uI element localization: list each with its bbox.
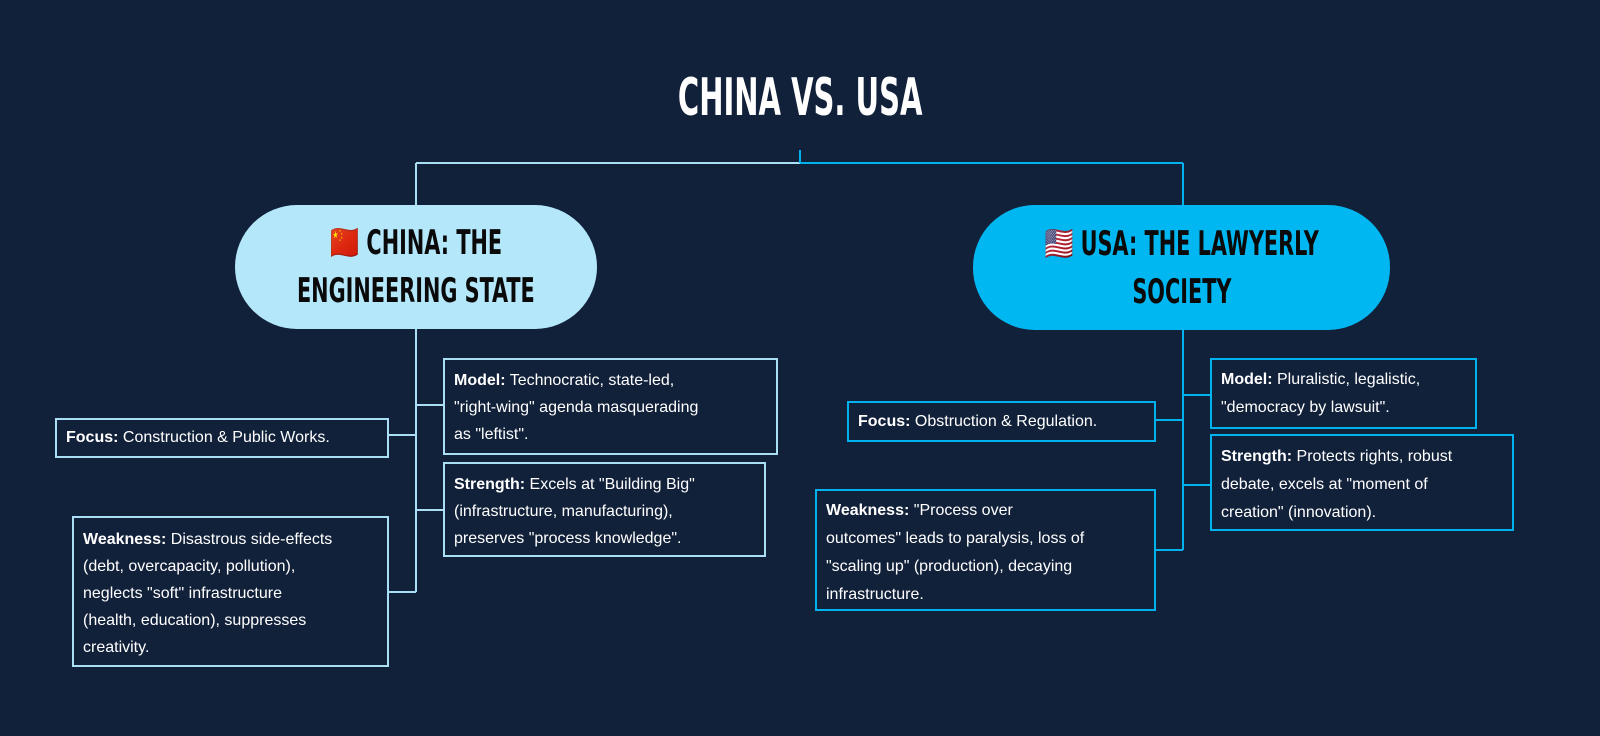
box: USA model: "democracy by lawsuit". xyxy=(1221,399,1390,416)
box: China weakness: neglects "soft" infrastructure xyxy=(83,585,282,602)
box: China weakness: (debt, overcapacity, pollution), xyxy=(83,558,295,575)
box: China model: as "leftist". xyxy=(454,426,528,443)
box: China strength: Strength: Excels at "Building Big" xyxy=(454,476,695,493)
box: USA weakness: outcomes" leads to paralysis, loss of xyxy=(826,530,1084,547)
box: China focus: Focus: Construction & Public Works. xyxy=(66,429,330,446)
title: CHINA VS. USA xyxy=(678,68,922,128)
box: USA weakness: "scaling up" (production), decaying xyxy=(826,558,1072,575)
box: China weakness xyxy=(72,516,389,667)
pill: China: ENGINEERING STATE xyxy=(297,271,535,311)
box: USA model: Model: Pluralistic, legalistic, xyxy=(1221,371,1420,388)
pill: USA: 🇺🇸 USA: THE LAWYERLY xyxy=(1044,224,1319,264)
box: USA strength xyxy=(1210,434,1514,531)
box: China strength: (infrastructure, manufacturing), xyxy=(454,503,673,520)
pill: USA xyxy=(973,205,1390,330)
box: USA model xyxy=(1210,358,1477,429)
box: China model: Model: Technocratic, state-led, xyxy=(454,372,674,389)
pill: China: 🇨🇳 CHINA: THE xyxy=(330,223,502,263)
box: China model xyxy=(443,358,778,455)
box: USA focus: Focus: Obstruction & Regulation. xyxy=(858,413,1097,430)
box: China weakness: (health, education), suppresses xyxy=(83,612,306,629)
box: USA strength: Strength: Protects rights, robust xyxy=(1221,448,1452,465)
pill: USA: SOCIETY xyxy=(1132,272,1231,312)
box: China weakness: Weakness: Disastrous side-effects xyxy=(83,531,332,548)
box: USA weakness: Weakness: "Process over xyxy=(826,502,1013,519)
box: China weakness: creativity. xyxy=(83,639,149,656)
box: China focus xyxy=(55,418,389,458)
box: USA weakness: infrastructure. xyxy=(826,586,924,603)
box: China strength: preserves "process knowledge". xyxy=(454,530,681,547)
box: China strength xyxy=(443,462,766,557)
box: USA weakness xyxy=(815,489,1156,611)
box: USA strength: creation" (innovation). xyxy=(1221,504,1376,521)
box: China model: "right-wing" agenda masquerading xyxy=(454,399,698,416)
box: USA focus xyxy=(847,401,1156,442)
box: USA strength: debate, excels at "moment of xyxy=(1221,476,1428,493)
pill: China xyxy=(235,205,597,329)
